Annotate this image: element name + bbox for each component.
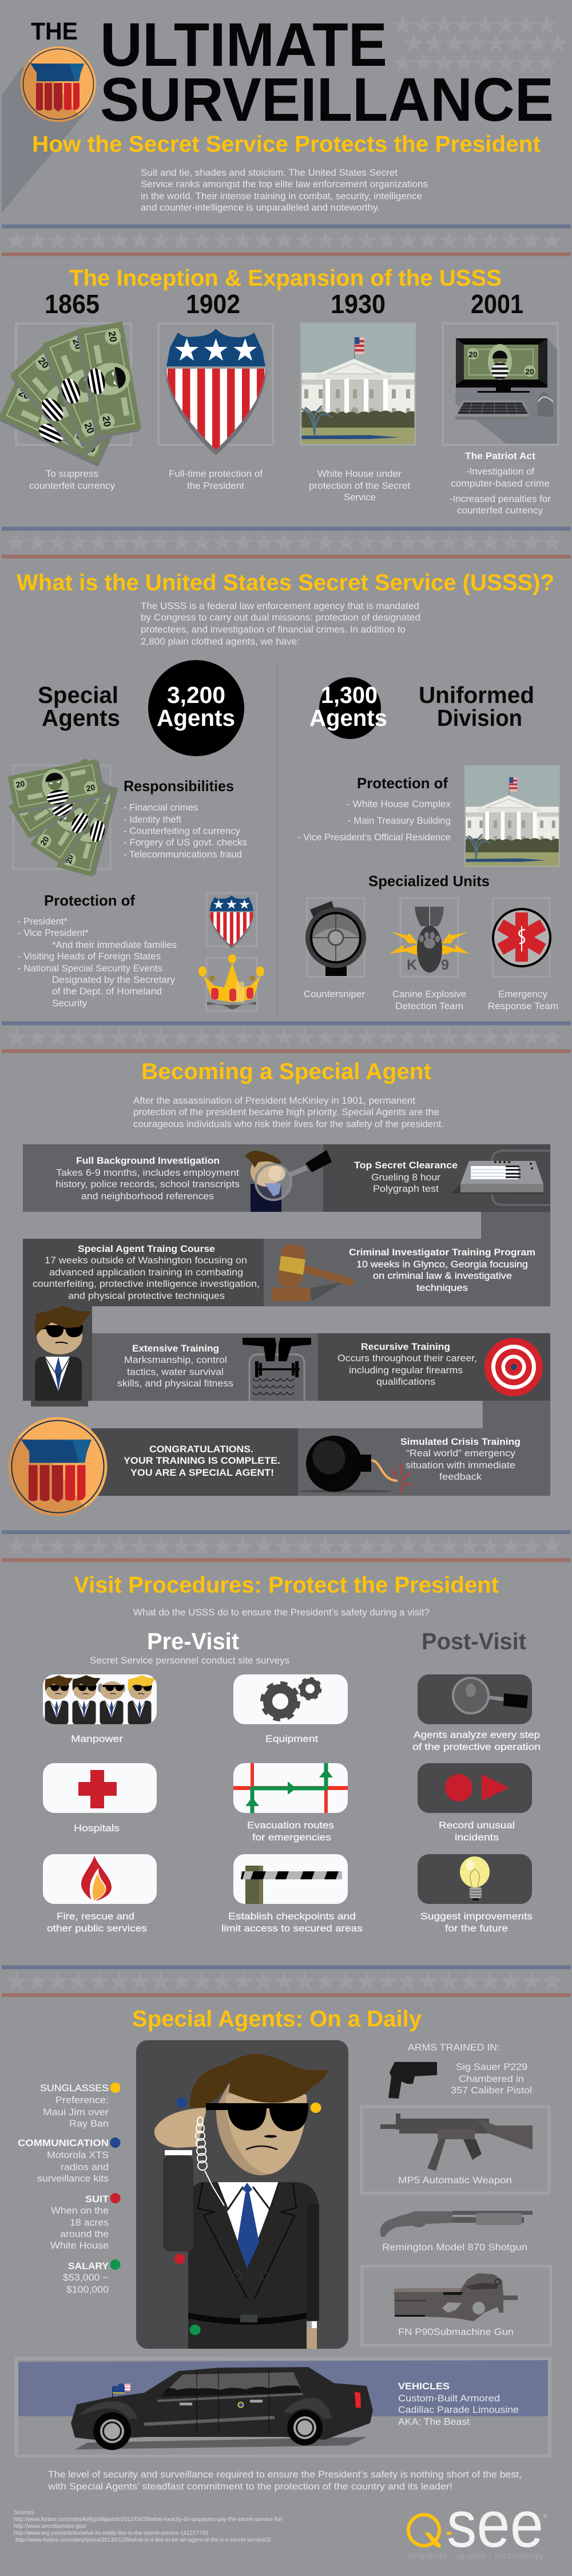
unit: countersniper: Countersniper xyxy=(304,989,365,999)
label list: agent equipment: Preference: xyxy=(55,2095,109,2105)
card: evacuation routes: Evacuation routes xyxy=(247,1820,334,1831)
timeline column: 1902 xyxy=(158,289,273,491)
step: criminal investigator training: 10 weeks in Glynco, Georgia focusing xyxy=(356,1259,528,1270)
card: improvements: Suggest improvements xyxy=(420,1911,533,1922)
card: hospitals xyxy=(43,1763,157,1834)
card: equipment xyxy=(233,1674,348,1744)
card: manpower xyxy=(43,1674,157,1744)
panel: vehicle xyxy=(17,2358,550,2456)
stat: special agents 3,200: Agents xyxy=(42,705,120,731)
list: protection of (uniformed division): Protection of xyxy=(357,775,448,792)
label list: agent equipment: Ray Ban xyxy=(69,2118,109,2129)
label list: agent equipment: 18 acres xyxy=(70,2217,109,2228)
step: background investigation: Takes 6-9 months, includes employment xyxy=(56,1167,239,1178)
step: congratulations: CONGRATULATIONS. xyxy=(149,1444,253,1455)
card: evacuation routes: for emergencies xyxy=(252,1832,331,1843)
text block: becoming an agent intro: protection of the president became high priority. Special Agents are the xyxy=(133,1107,439,1117)
card: record incidents xyxy=(418,1763,532,1843)
vehicle text: Cadillac Parade Limousine xyxy=(398,2404,519,2415)
closing statement xyxy=(47,2469,522,2492)
timeline column: 1930: Service xyxy=(344,492,376,503)
question text: What do the USSS do to ensure the President’s safety during a visit? xyxy=(133,1607,430,1618)
list: protection of (special agents): Security xyxy=(52,998,87,1009)
unit: canine explosive detection: Detection Team xyxy=(395,1001,463,1012)
sources: http://www.forbes.com/sites/quora/2013/01/28/what-is-it-like-to-be-an-agent-of-the-u-s-secret-service/2/ xyxy=(15,2537,271,2543)
closing statement: with Special Agents’ steadfast commitment to the protection of the country and its leader! xyxy=(47,2481,452,2492)
arms heading: ARMS TRAINED IN: xyxy=(408,2042,500,2053)
intro text block: and counter-intelligence is unparalleled and noteworthy. xyxy=(141,202,380,213)
panel: special agents on a daily xyxy=(17,2006,551,2456)
list: protection of (special agents): - Visiting Heads of Foreign States xyxy=(18,951,161,962)
intro text block xyxy=(141,167,428,213)
timeline column: 1902: 1902 xyxy=(186,289,240,319)
card: fire and rescue: other public services xyxy=(47,1923,147,1934)
icon: fan of counterfeit bills xyxy=(0,322,142,467)
list: protection of (special agents): Designated by the Secretary xyxy=(52,974,175,985)
label list: agent equipment: surveillance kits xyxy=(37,2173,109,2184)
panel: visit procedures xyxy=(43,1573,541,1934)
step: congratulations xyxy=(124,1444,280,1478)
step: special agent training course: and physical protective techniques xyxy=(68,1290,225,1301)
card: analyze operation: of the protective operation xyxy=(412,1741,541,1752)
list: protection of (special agents): Protection of xyxy=(44,892,135,909)
timeline column: 2001: -Increased penalties for xyxy=(450,493,551,504)
label list: agent equipment: When on the xyxy=(51,2205,109,2216)
vehicle text: AKA: The Beast xyxy=(398,2416,470,2427)
panel: inception and expansion timeline xyxy=(0,266,558,516)
step: special agent training course xyxy=(33,1243,260,1301)
icon: gavel xyxy=(272,1243,350,1301)
step: special agent training course: Special Agent Traing Course xyxy=(78,1243,215,1254)
step: extensive training: tactics, water survival xyxy=(127,1366,224,1377)
card: improvements xyxy=(418,1854,533,1934)
list: protection of (special agents): of the Dept. of Homeland xyxy=(52,986,162,997)
label list: agent equipment: Motorola XTS xyxy=(47,2150,109,2160)
step: simulated crisis training: feedback xyxy=(439,1471,482,1482)
unit: canine explosive detection: 9 xyxy=(441,957,449,973)
list: responsibilities: - Financial crimes xyxy=(124,802,198,813)
list: protection of (special agents) xyxy=(18,892,177,1009)
step: top secret clearance: Grueling 8 hour xyxy=(371,1172,440,1183)
unit: emergency response xyxy=(488,898,558,1012)
step: special agent training course: 17 weeks outside of Washington focusing on xyxy=(45,1255,247,1266)
header shadow behind the badge xyxy=(2,67,88,213)
step: background investigation xyxy=(55,1150,332,1212)
heading: becoming a special agent: Becoming a Special Agent xyxy=(141,1059,431,1084)
text block: USSS description xyxy=(141,600,420,647)
list: responsibilities: - Forgery of US govt. checks xyxy=(124,837,247,848)
sources: http://www.secretservice.gov/ xyxy=(14,2523,86,2530)
list: responsibilities xyxy=(124,777,247,860)
step: recursive training: Occurs throughout their career, xyxy=(337,1353,477,1364)
icon: target xyxy=(484,1338,543,1396)
illustration: small White House xyxy=(464,765,560,867)
step: top secret clearance xyxy=(354,1151,550,1205)
weapon: Sig Sauer pistol xyxy=(388,2061,532,2099)
text block: USSS description: 2,800 plain clothed agents, we have: xyxy=(141,636,300,647)
label list: agent equipment: SALARY xyxy=(68,2261,109,2271)
timeline column: 1902: Full-time protection of xyxy=(169,468,263,479)
logo: Q-See: ® xyxy=(543,2513,547,2519)
icon: polygraph machine xyxy=(451,1151,550,1205)
icon: secret service badge xyxy=(18,46,96,124)
label list: agent equipment: White House xyxy=(50,2240,109,2251)
timeline column: 1865: counterfeit currency xyxy=(29,480,115,491)
list: protection of (uniformed division): - Main Treasury Building xyxy=(348,815,451,826)
unit: countersniper xyxy=(304,898,366,999)
card: equipment: Equipment xyxy=(265,1733,318,1744)
text block: USSS description: The USSS is a federal law enforcement agency that is mandated xyxy=(141,600,419,611)
weapon: FN P90 xyxy=(362,2266,551,2345)
icon: computer with hacker on screen: 20 xyxy=(468,350,478,359)
card: checkpoints xyxy=(221,1854,363,1934)
card: record incidents: Record unusual xyxy=(439,1820,515,1831)
list: protection of (uniformed division): - Vice President’s Official Residence xyxy=(297,832,451,843)
icon: bills in frame xyxy=(7,757,118,877)
vehicle text: VEHICLES xyxy=(398,2381,450,2392)
unit: emergency response: Response Team xyxy=(488,1001,558,1012)
list: protection of (uniformed division): - White House Complex xyxy=(347,799,451,809)
timeline column: 1930: White House under xyxy=(317,468,402,479)
unit: emergency response: Emergency xyxy=(498,989,547,999)
step: simulated crisis training: Simulated Crisis Training xyxy=(400,1436,521,1447)
timeline column: 1930: 1930 xyxy=(331,289,386,319)
stat: special agents 3,200: 3,200 xyxy=(167,682,225,708)
icon: guns, dumbbell and water xyxy=(243,1338,311,1401)
stat: uniformed division 1,300: Agents xyxy=(309,705,387,731)
step: criminal investigator training: on criminal law & investigative xyxy=(373,1270,512,1281)
icon: computer with hacker on screen: 20 xyxy=(525,367,534,376)
step: background investigation: history, police records, school transcripts xyxy=(55,1179,240,1190)
stat: special agents 3,200: Special xyxy=(38,682,118,708)
illustration: agent in sunglasses xyxy=(31,1306,91,1406)
list: responsibilities: Responsibilities xyxy=(124,777,234,795)
timeline column: 1902: the President xyxy=(187,480,244,491)
card: hospitals: Hospitals xyxy=(74,1823,120,1834)
timeline column: 1930: protection of the Secret xyxy=(309,480,410,491)
closing statement: The level of security and surveillance required to ensure the President’s safety is nothing short of the best, xyxy=(48,2469,522,2480)
timeline column: 2001 xyxy=(443,289,558,516)
timeline column: 2001: The Patriot Act xyxy=(465,451,535,461)
step: criminal investigator training: techniques xyxy=(416,1282,468,1293)
heading: inception: The Inception & Expansion of the USSS xyxy=(69,266,502,291)
text block: becoming an agent intro: After the assassination of President McKinley in 1901, permanent xyxy=(133,1095,415,1106)
step: recursive training: including regular firearms xyxy=(349,1365,463,1376)
stat: uniformed division 1,300 xyxy=(309,677,534,739)
unit: canine explosive detection: K xyxy=(407,957,417,973)
step: criminal investigator training xyxy=(272,1243,535,1301)
card: analyze operation xyxy=(412,1674,541,1752)
timeline column: 1865: 1865 xyxy=(45,289,100,319)
step: top secret clearance: Top Secret Clearance xyxy=(354,1160,458,1171)
intro text block: Suit and tie, shades and stoicism. The United States Secret xyxy=(141,167,398,178)
weapon: Sig Sauer pistol: Sig Sauer P229 xyxy=(456,2061,527,2072)
weapon: Remington shotgun xyxy=(380,2211,533,2253)
label list: agent equipment: $53,000 ~ xyxy=(63,2272,109,2283)
list: responsibilities: - Counterfeiting of currency xyxy=(124,825,240,836)
logo: Q-See xyxy=(407,2488,547,2561)
text block: becoming an agent intro xyxy=(133,1095,444,1129)
step: top secret clearance: Polygraph test xyxy=(373,1183,439,1194)
list: protection of (special agents): - President* xyxy=(18,916,67,927)
card: fire and rescue: Fire, rescue and xyxy=(57,1911,134,1922)
text block: USSS description: protectees, and investigation of financial crimes. In addition to xyxy=(141,624,406,635)
label list: agent equipment: COMMUNICATION xyxy=(18,2138,109,2148)
column heading: post-visit: Post-Visit xyxy=(422,1628,526,1654)
step: extensive training: Marksmanship, control xyxy=(124,1354,227,1365)
weapon: FN P90: FN P90Submachine Gun xyxy=(398,2326,514,2337)
step: special agent training course: counterfeiting, protective intelligence investigation, xyxy=(33,1278,260,1289)
card: checkpoints: Establish checkpoints and xyxy=(228,1911,356,1922)
step: simulated crisis training: situation with immediate xyxy=(406,1460,515,1471)
heading: specialized units: Specialized Units xyxy=(368,872,490,890)
step: simulated crisis training xyxy=(299,1435,521,1493)
step path bands xyxy=(23,1144,550,1496)
illustration: agent portrait panel xyxy=(136,2040,348,2349)
step: extensive training: Extensive Training xyxy=(132,1343,219,1354)
list: protection of (special agents): - Vice President* xyxy=(18,927,89,938)
card: fire and rescue xyxy=(43,1854,157,1934)
step: simulated crisis training: “Real world” emergency xyxy=(406,1448,516,1459)
heading: visit procedures: Visit Procedures: Protect the President xyxy=(74,1573,499,1598)
sources xyxy=(14,2510,283,2543)
card: checkpoints: limit access to secured areas xyxy=(221,1923,363,1934)
timeline column: 1865: To suppress xyxy=(46,468,98,479)
pre-visit note: Secret Service personnel conduct site surveys xyxy=(90,1655,289,1666)
timeline column: 2001: -Investigation of xyxy=(466,466,534,477)
step: background investigation: Full Background Investigation xyxy=(76,1155,220,1166)
title: THE xyxy=(31,18,78,45)
step: criminal investigator training: Criminal Investigator Training Program xyxy=(349,1247,535,1258)
stat: special agents 3,200: Agents xyxy=(157,705,235,731)
weapon: MP5 xyxy=(362,2107,549,2193)
intro text block: in the world. Their intense training in combat, security, intelligence xyxy=(141,191,422,202)
step: background investigation: and neighborhood references xyxy=(81,1191,214,1202)
sources: http://www.forbes.com/sites/kellyphillipserb/2012/04/28/what-exactly-do-taxpayers-pay-the-secret-service-for/ xyxy=(14,2516,283,2523)
label list: agent equipment: SUIT xyxy=(85,2194,109,2204)
text block: USSS description: by Congress to carry out dual missions: protection of designated xyxy=(141,612,420,623)
icon: flag shield xyxy=(163,329,269,455)
card: record incidents: incidents xyxy=(455,1832,499,1843)
icon: large secret service badge xyxy=(5,1417,107,1519)
subtitle: How the Secret Service Protects the President xyxy=(32,132,541,157)
sources: http://www.wsj.com/articles/what-its-really-like-in-the-secret-service-141217793 xyxy=(14,2530,208,2537)
timeline column: 2001: counterfeit currency xyxy=(457,505,543,516)
intro text block: Service ranks amongst the top elite law enforcement organizations xyxy=(141,179,428,189)
list: protection of (uniformed division) xyxy=(297,775,451,843)
weapon: MP5: MP5 Automatic Weapon xyxy=(398,2175,512,2186)
label list: agent equipment: Maui Jim over xyxy=(43,2107,109,2117)
step: recursive training: Recursive Training xyxy=(361,1341,450,1352)
text block: becoming an agent intro: courageous individuals who risk their lives for the safety of the president. xyxy=(133,1119,444,1129)
timeline column: 2001: 2001 xyxy=(471,289,523,319)
icon: bomb xyxy=(299,1435,412,1493)
unit: canine explosive detection: Canine Explosive xyxy=(392,989,466,999)
label list: agent equipment: SUNGLASSES xyxy=(40,2083,109,2093)
icon: crown in frame xyxy=(198,954,264,1011)
label list: agent equipment: $100,000 xyxy=(66,2284,109,2295)
stat: uniformed division 1,300: 1,300 xyxy=(321,682,378,708)
label list: agent equipment: around the xyxy=(60,2229,109,2239)
label list: agent equipment xyxy=(18,2083,120,2295)
vehicle text xyxy=(398,2381,519,2427)
illustration: presidential limousine xyxy=(71,2367,373,2450)
step: recursive training: qualifications xyxy=(376,1376,435,1387)
list: responsibilities: - Telecommunications fraud xyxy=(124,849,242,860)
icon: agent under magnifying glass xyxy=(245,1150,332,1212)
stat: special agents 3,200 xyxy=(38,660,244,756)
list: protection of (special agents): - National Special Security Events xyxy=(18,963,162,974)
icon: computer with hacker on screen xyxy=(450,338,557,444)
timeline column: 2001: computer-based crime xyxy=(451,478,550,489)
step: extensive training xyxy=(117,1338,311,1401)
card: manpower: Manpower xyxy=(71,1733,123,1744)
sources: Sources xyxy=(14,2510,34,2516)
timeline column: 1930 xyxy=(300,289,416,503)
unit: canine explosive detection xyxy=(390,898,470,1012)
vehicle text: Custom-Built Armored xyxy=(398,2393,500,2404)
heading: on a daily: Special Agents: On a Daily xyxy=(132,2006,422,2032)
step: special agent training course: advanced application training in combating xyxy=(49,1267,243,1278)
column heading: pre-visit: Pre-Visit xyxy=(147,1628,239,1654)
list: protection of (special agents): *And their immediate families xyxy=(52,939,177,950)
logo: Q-See: simplicity - quality - technology xyxy=(407,2551,543,2561)
logo: Q-See: see xyxy=(447,2488,543,2561)
title: ULTIMATE xyxy=(100,10,387,79)
weapon: Remington shotgun: Remington Model 870 Shotgun xyxy=(382,2242,527,2253)
heading: what is the USSS: What is the United States Secret Service (USSS)? xyxy=(17,570,554,595)
weapon: Sig Sauer pistol: Chambered in xyxy=(459,2073,524,2084)
title xyxy=(31,10,554,134)
step: recursive training xyxy=(337,1338,543,1396)
icon: small shield in frame xyxy=(206,893,257,949)
stat: uniformed division 1,300: Division xyxy=(437,705,522,731)
card: analyze operation: Agents analyze every step xyxy=(414,1729,540,1740)
step: extensive training: skills, and physical fitness xyxy=(117,1378,233,1389)
label list: agent equipment: radios and xyxy=(61,2162,109,2172)
timeline column: 1865 xyxy=(0,289,142,491)
stat: uniformed division 1,300: Uniformed xyxy=(419,682,534,708)
panel: becoming a special agent xyxy=(5,1059,550,1519)
title: SURVEILLANCE xyxy=(100,65,554,134)
weapon: Sig Sauer pistol: 357 Caliber Pistol xyxy=(451,2085,532,2096)
panel: what is the USSS xyxy=(7,570,560,1013)
card: improvements: for the future xyxy=(445,1923,508,1934)
card: evacuation routes xyxy=(233,1763,348,1843)
step: congratulations: YOUR TRAINING IS COMPLETE. xyxy=(124,1455,280,1466)
step: congratulations: YOU ARE A SPECIAL AGENT! xyxy=(130,1467,274,1478)
list: responsibilities: - Identity theft xyxy=(124,814,181,825)
illustration: White House xyxy=(300,323,416,445)
